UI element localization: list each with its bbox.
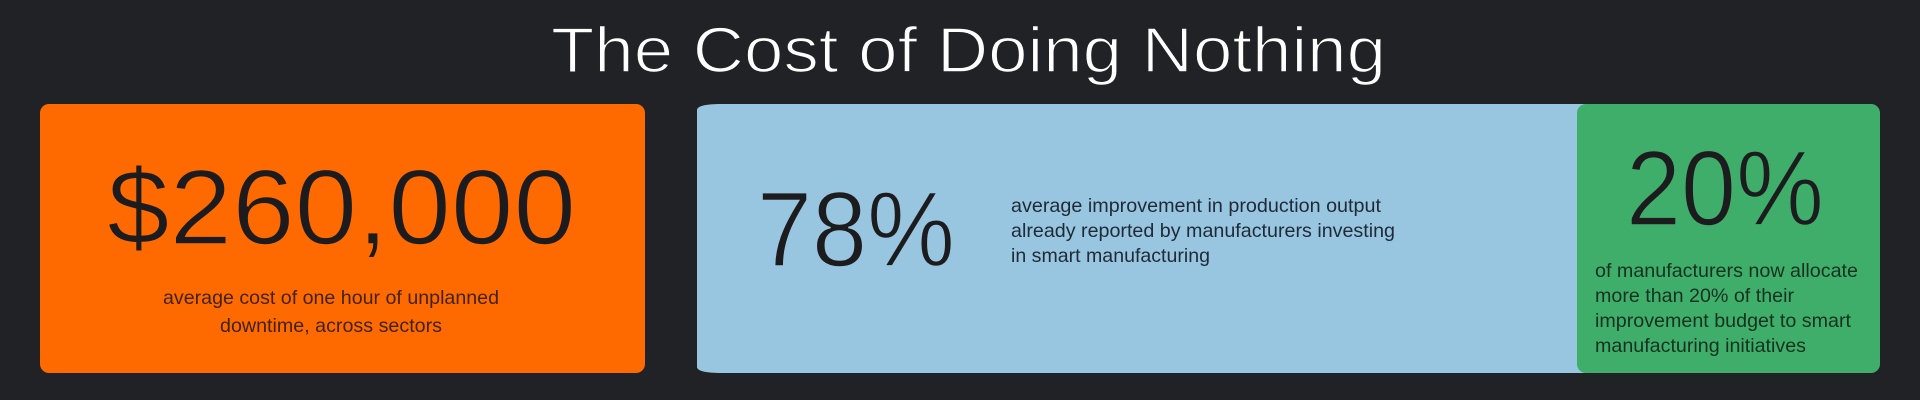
caption: improvement budget: improvement budget to smart [1595, 310, 1852, 332]
orange card background [40, 104, 645, 373]
stat: 78%: 78% [757, 169, 955, 289]
blue card background [697, 104, 1590, 373]
caption: improvement budget: more than 20% of their [1595, 285, 1795, 307]
caption: production output: average improvement in production output [1011, 195, 1382, 217]
stat: 20%: 20% [1626, 128, 1824, 248]
caption: production output [1011, 195, 1395, 267]
caption: production output: already reported by manufacturers investing [1011, 220, 1395, 242]
panel: downtime cost [40, 104, 645, 373]
caption: downtime cost [163, 287, 499, 337]
caption: production output: in smart manufacturing [1011, 245, 1210, 267]
stat: $260,000: $260,000 [107, 147, 576, 267]
caption: improvement budget: manufacturing initiatives [1595, 335, 1806, 357]
panel: improvement budget [1577, 104, 1880, 373]
caption: downtime cost: downtime, across sectors [220, 315, 442, 337]
green card background [1577, 104, 1880, 373]
title: The Cost of Doing Nothing [551, 14, 1386, 86]
panel: production output [697, 104, 1590, 373]
caption: improvement budget [1595, 260, 1858, 357]
caption: improvement budget: of manufacturers now allocate [1595, 260, 1858, 282]
caption: downtime cost: average cost of one hour of unplanned [163, 287, 499, 309]
